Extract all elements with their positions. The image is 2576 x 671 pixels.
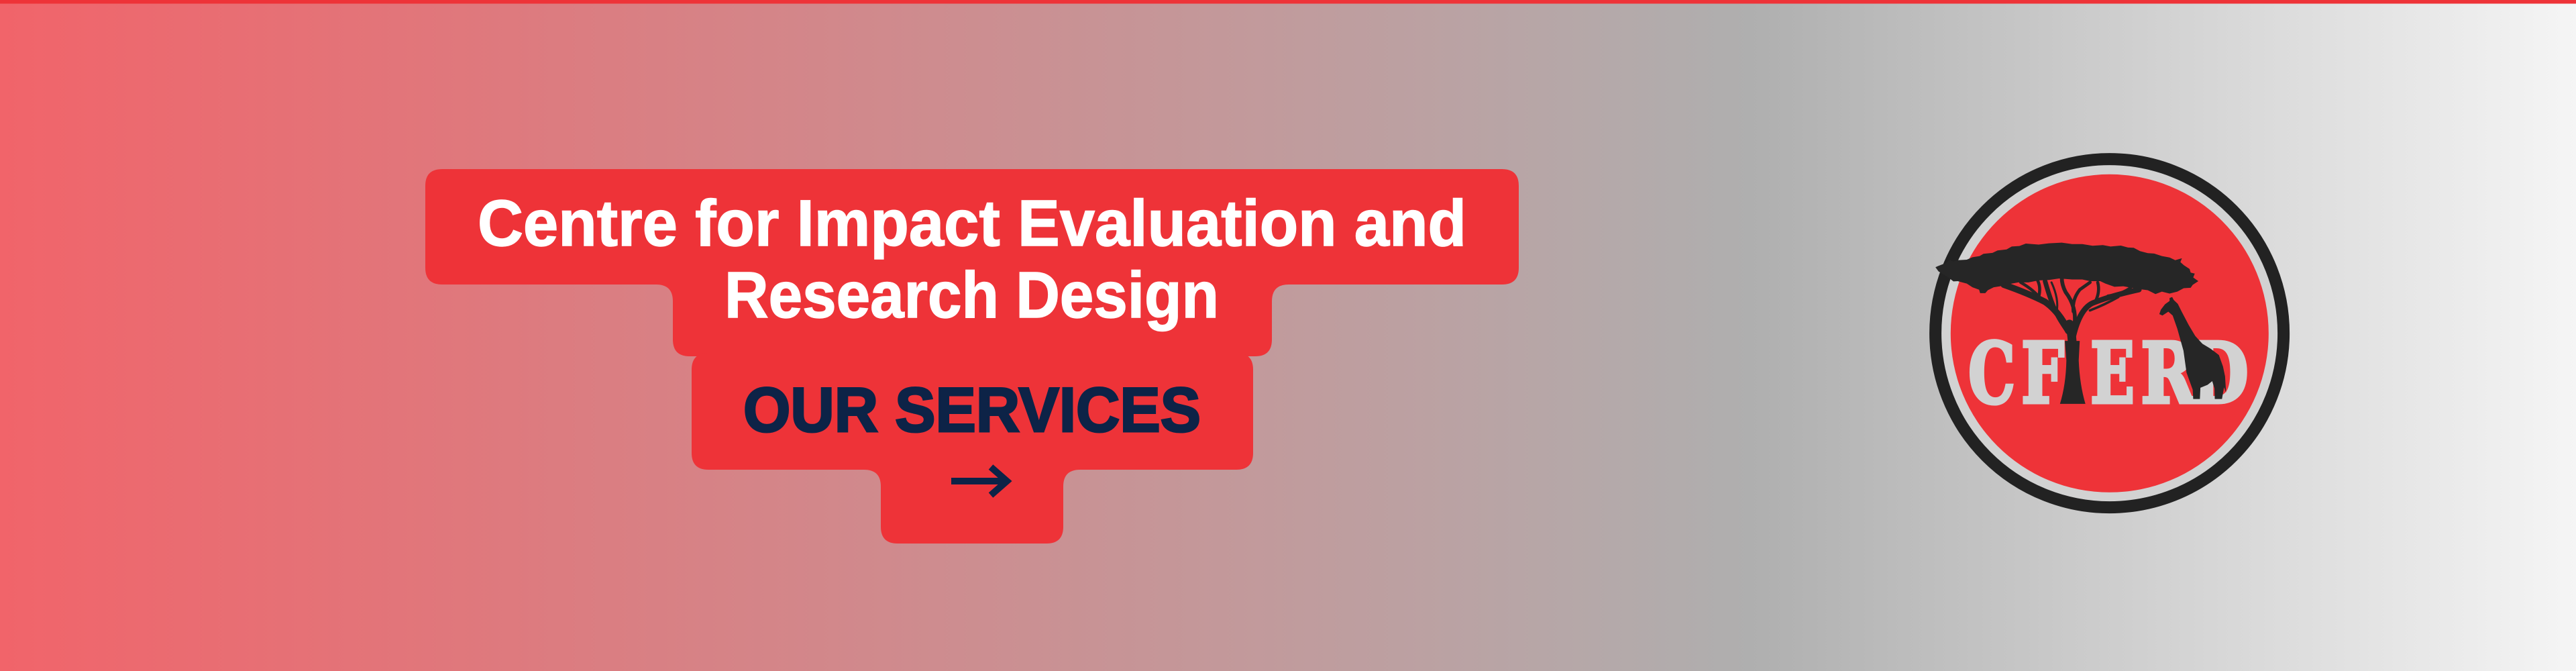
top red bar <box>0 0 2576 3</box>
button label: OUR SERVICES <box>743 374 1201 445</box>
icon: acacia tree and giraffe silhouette <box>1935 243 2226 404</box>
heading: organisation name <box>478 187 1466 331</box>
logo wordmark: D <box>2190 325 2249 423</box>
icon: right arrow <box>951 467 1007 495</box>
panel: our services button <box>692 353 1253 544</box>
panel: organisation name plaque <box>425 169 1519 356</box>
plaque shape: name <box>425 169 1519 356</box>
logo outer black ring <box>1935 159 2284 507</box>
logo wordmark: F <box>2021 325 2064 423</box>
giraffe <box>2159 297 2226 399</box>
tree canopy <box>1935 243 2198 294</box>
logo wordmark: C <box>1968 325 2015 423</box>
tree branches <box>2004 278 2139 348</box>
tree trunk <box>2060 341 2086 404</box>
heading: organisation name: Centre for Impact Evaluation and <box>478 187 1466 260</box>
button shape <box>692 353 1253 544</box>
logo red disc <box>1951 174 2269 493</box>
logo wordmark: R <box>2141 325 2196 423</box>
logo wordmark <box>1968 325 2249 423</box>
heading: organisation name: Research Design <box>724 258 1219 331</box>
logo: CFIERD roundel <box>1935 159 2284 507</box>
logo wordmark: E <box>2090 325 2135 423</box>
